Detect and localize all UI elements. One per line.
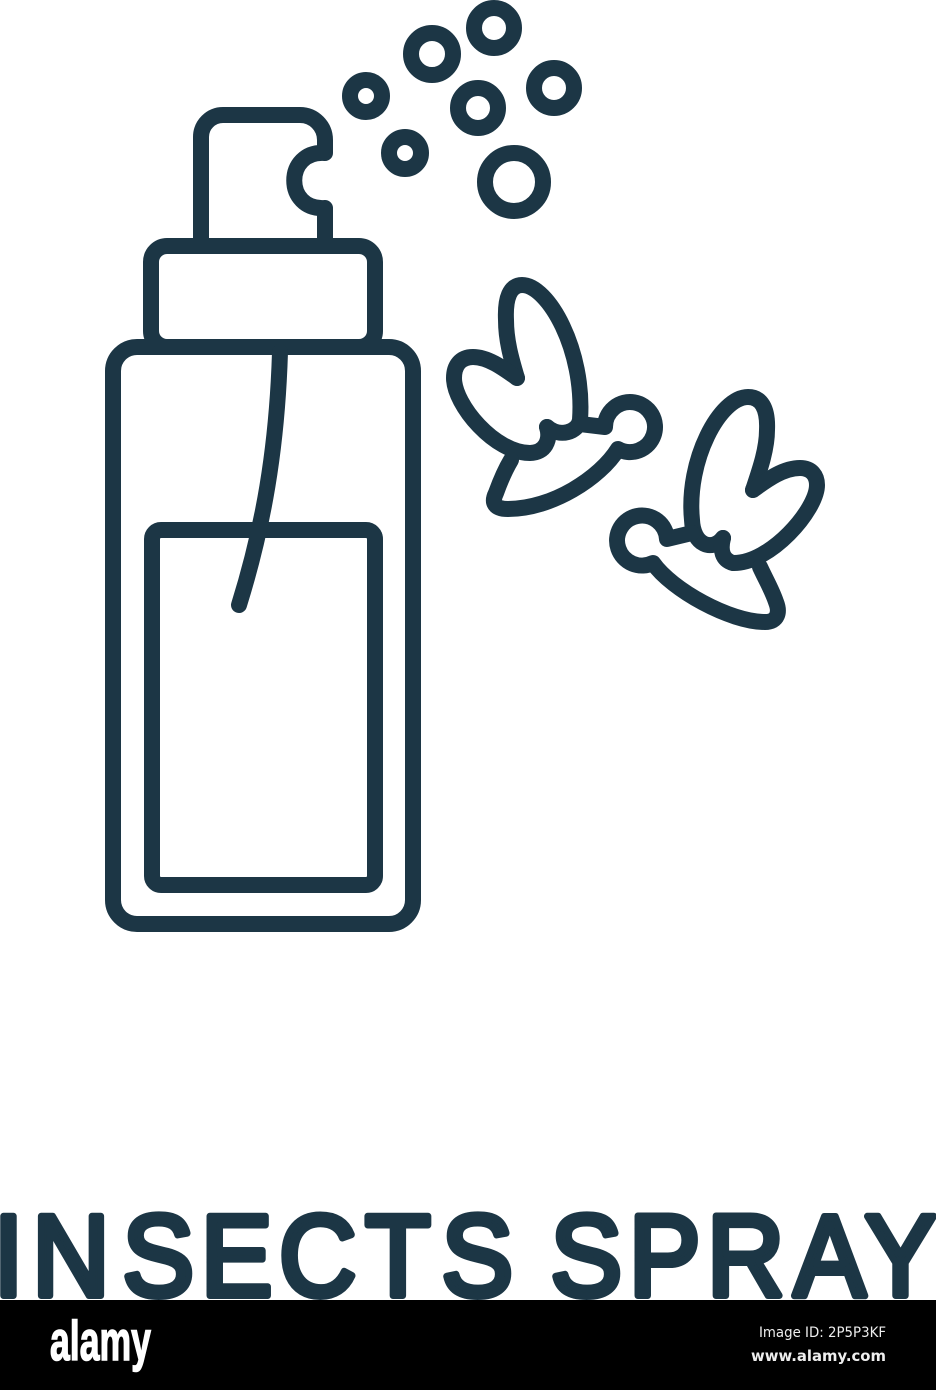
image id: Image ID: 2P5P3KF [759,1325,886,1341]
footer bar [0,1300,936,1390]
nozzle [201,115,325,246]
icon: spray bottle [113,115,413,924]
dip tube [239,352,280,605]
icon: spray droplets [350,8,574,211]
icon: insect left [454,285,655,509]
bottle body [113,347,413,924]
icon: insect right [617,397,817,622]
bottle cap [151,246,375,347]
title: INSECTS SPRAY [0,1191,936,1320]
liquid level [152,530,375,885]
website: www.alamy.com [751,1347,886,1365]
alamy logo: alamy [50,1309,151,1372]
